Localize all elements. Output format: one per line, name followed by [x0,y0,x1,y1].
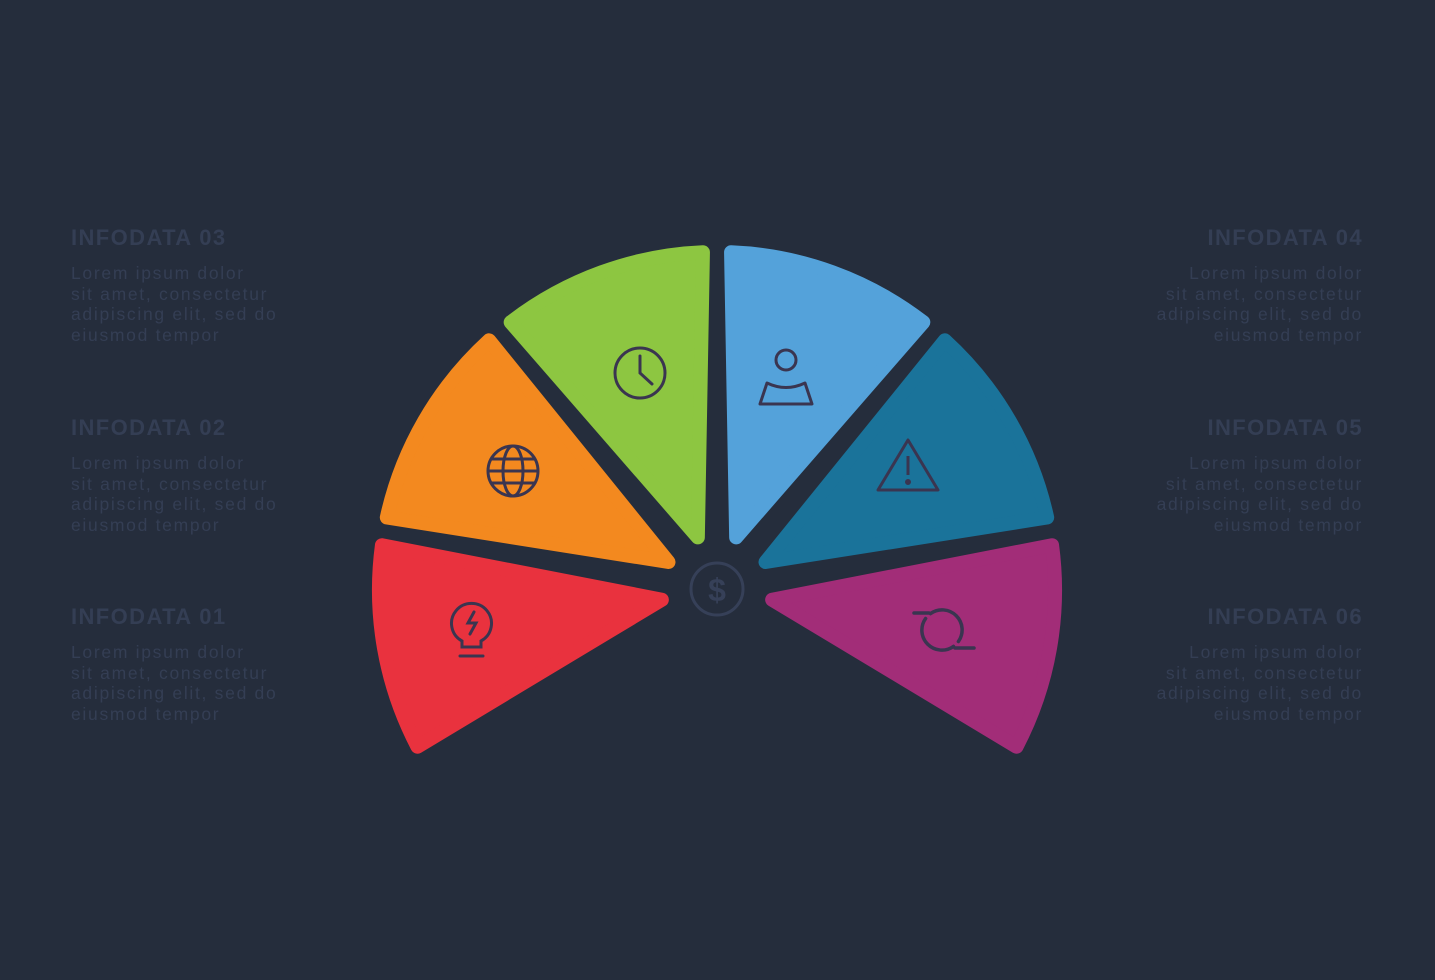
sector: teal 05 [714,332,1061,651]
icon: light bulb [452,603,492,656]
text block: infodata 05: eiusmod tempor [1214,514,1363,534]
text block: infodata 01: eiusmod tempor [71,704,220,724]
icon: globe [488,446,538,496]
text block: infodata 04: INFODATA 04 [1207,225,1363,250]
text block: infodata 01: INFODATA 01 [71,604,227,629]
text block: infodata 03: sit amet, consectetur [71,284,268,304]
text block: infodata 06: sit amet, consectetur [1166,662,1363,682]
text block: infodata 02: INFODATA 02 [71,415,227,440]
icon: clock [615,348,665,398]
text block: infodata 04: adipiscing elit, sed do [1157,304,1363,324]
icon: dollar circle [691,563,743,615]
text block: infodata 03: adipiscing elit, sed do [71,304,277,324]
text block: infodata 03: eiusmod tempor [71,324,220,344]
text block: infodata 03 [71,225,277,344]
text block: infodata 01: adipiscing elit, sed do [71,683,277,703]
icon: dollar circle: $ [708,572,726,608]
text block: infodata 06 [1157,604,1363,724]
text block: infodata 06: INFODATA 06 [1207,604,1363,629]
text block: infodata 05: adipiscing elit, sed do [1157,494,1363,514]
text block: infodata 05 [1157,415,1363,534]
text block: infodata 05: Lorem ipsum dolor [1189,453,1363,473]
icon: refresh [914,610,974,650]
icon: user [760,350,812,404]
text block: infodata 06: Lorem ipsum dolor [1189,642,1363,662]
text block: infodata 02: sit amet, consectetur [71,474,268,494]
text block: infodata 04: Lorem ipsum dolor [1189,263,1363,283]
text block: infodata 04: eiusmod tempor [1214,324,1363,344]
sector: orange 02 [373,332,720,651]
text block: infodata 03: INFODATA 03 [71,225,227,250]
text block: infodata 01: Lorem ipsum dolor [71,642,245,662]
text block: infodata 03: Lorem ipsum dolor [71,263,245,283]
sector: blue 04 [640,237,929,572]
text block: infodata 04: sit amet, consectetur [1166,284,1363,304]
text block: infodata 01: sit amet, consectetur [71,662,268,682]
text block: infodata 02: Lorem ipsum dolor [71,453,245,473]
sector: green 03 [505,237,794,572]
text block: infodata 04 [1157,225,1363,344]
text block: infodata 02: adipiscing elit, sed do [71,494,277,514]
sector: red 01 [366,499,680,749]
sector: purple 06 [754,499,1068,749]
text block: infodata 01 [71,604,277,724]
text block: infodata 05: sit amet, consectetur [1166,474,1363,494]
text block: infodata 06: eiusmod tempor [1214,704,1363,724]
text block: infodata 05: INFODATA 05 [1207,415,1363,440]
text block: infodata 02 [71,415,277,534]
icon: warning [878,440,938,490]
text block: infodata 02: eiusmod tempor [71,514,220,534]
text block: infodata 06: adipiscing elit, sed do [1157,683,1363,703]
